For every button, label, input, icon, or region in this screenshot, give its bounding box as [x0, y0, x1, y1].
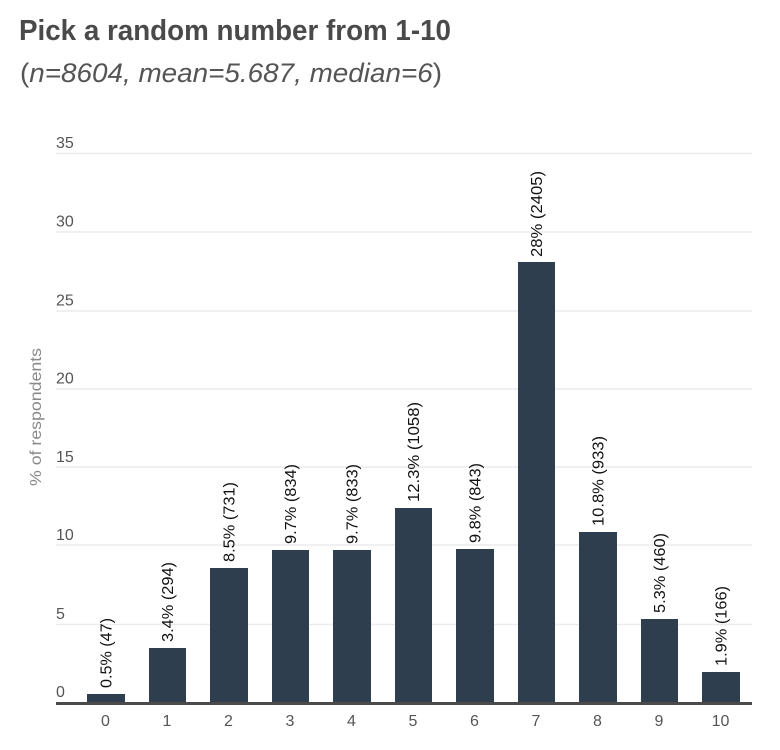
bar value labels: 9.7% (834)	[283, 464, 300, 544]
x axis tick labels: 9	[655, 713, 664, 730]
bar value labels: 0.5% (47)	[98, 618, 116, 688]
title: Pick a random number from 1-10	[19, 15, 451, 47]
bar value labels: 3.4% (294)	[160, 562, 177, 642]
bar chart	[28, 135, 752, 730]
y axis title: % of respondents	[28, 348, 45, 486]
bars	[87, 262, 740, 703]
bar value labels: 28% (2405)	[529, 171, 546, 257]
y axis tick labels: 25	[56, 292, 74, 310]
x axis tick labels	[101, 713, 730, 730]
subtitle: (n=8604, mean=5.687, median=6 )	[20, 58, 442, 88]
bar value labels: 12.3% (1058)	[406, 402, 423, 502]
y axis tick labels: 30	[56, 214, 74, 230]
x axis line	[56, 702, 752, 705]
y axis tick labels: 5	[56, 606, 65, 623]
y axis tick labels: 10	[56, 527, 74, 544]
bar value labels: 10.8% (933)	[590, 436, 608, 526]
x axis tick labels: 7	[532, 713, 541, 730]
x axis tick labels: 1	[163, 713, 172, 730]
x axis tick labels: 8	[593, 713, 602, 730]
y axis tick labels: 20	[56, 370, 74, 388]
y axis tick labels: 35	[56, 135, 74, 152]
bar value labels: 9.7% (833)	[344, 464, 362, 544]
x axis tick labels: 10	[712, 713, 730, 730]
bar value labels: 9.8% (843)	[468, 463, 484, 543]
bar value labels: 5.3% (460)	[652, 533, 669, 613]
x axis tick labels: 0	[101, 713, 110, 730]
x axis tick labels: 5	[409, 713, 418, 730]
bar value labels: 8.5% (731)	[222, 482, 238, 562]
x axis tick labels: 3	[286, 713, 295, 730]
x axis tick labels: 4	[347, 713, 356, 730]
bar value labels	[98, 171, 730, 688]
y axis tick labels: 15	[56, 449, 74, 466]
y axis tick labels: 0	[56, 684, 65, 701]
x axis tick labels: 2	[224, 713, 233, 730]
x axis tick labels: 6	[470, 713, 479, 730]
y axis tick labels	[56, 135, 74, 701]
bar value labels: 1.9% (166)	[714, 586, 730, 666]
